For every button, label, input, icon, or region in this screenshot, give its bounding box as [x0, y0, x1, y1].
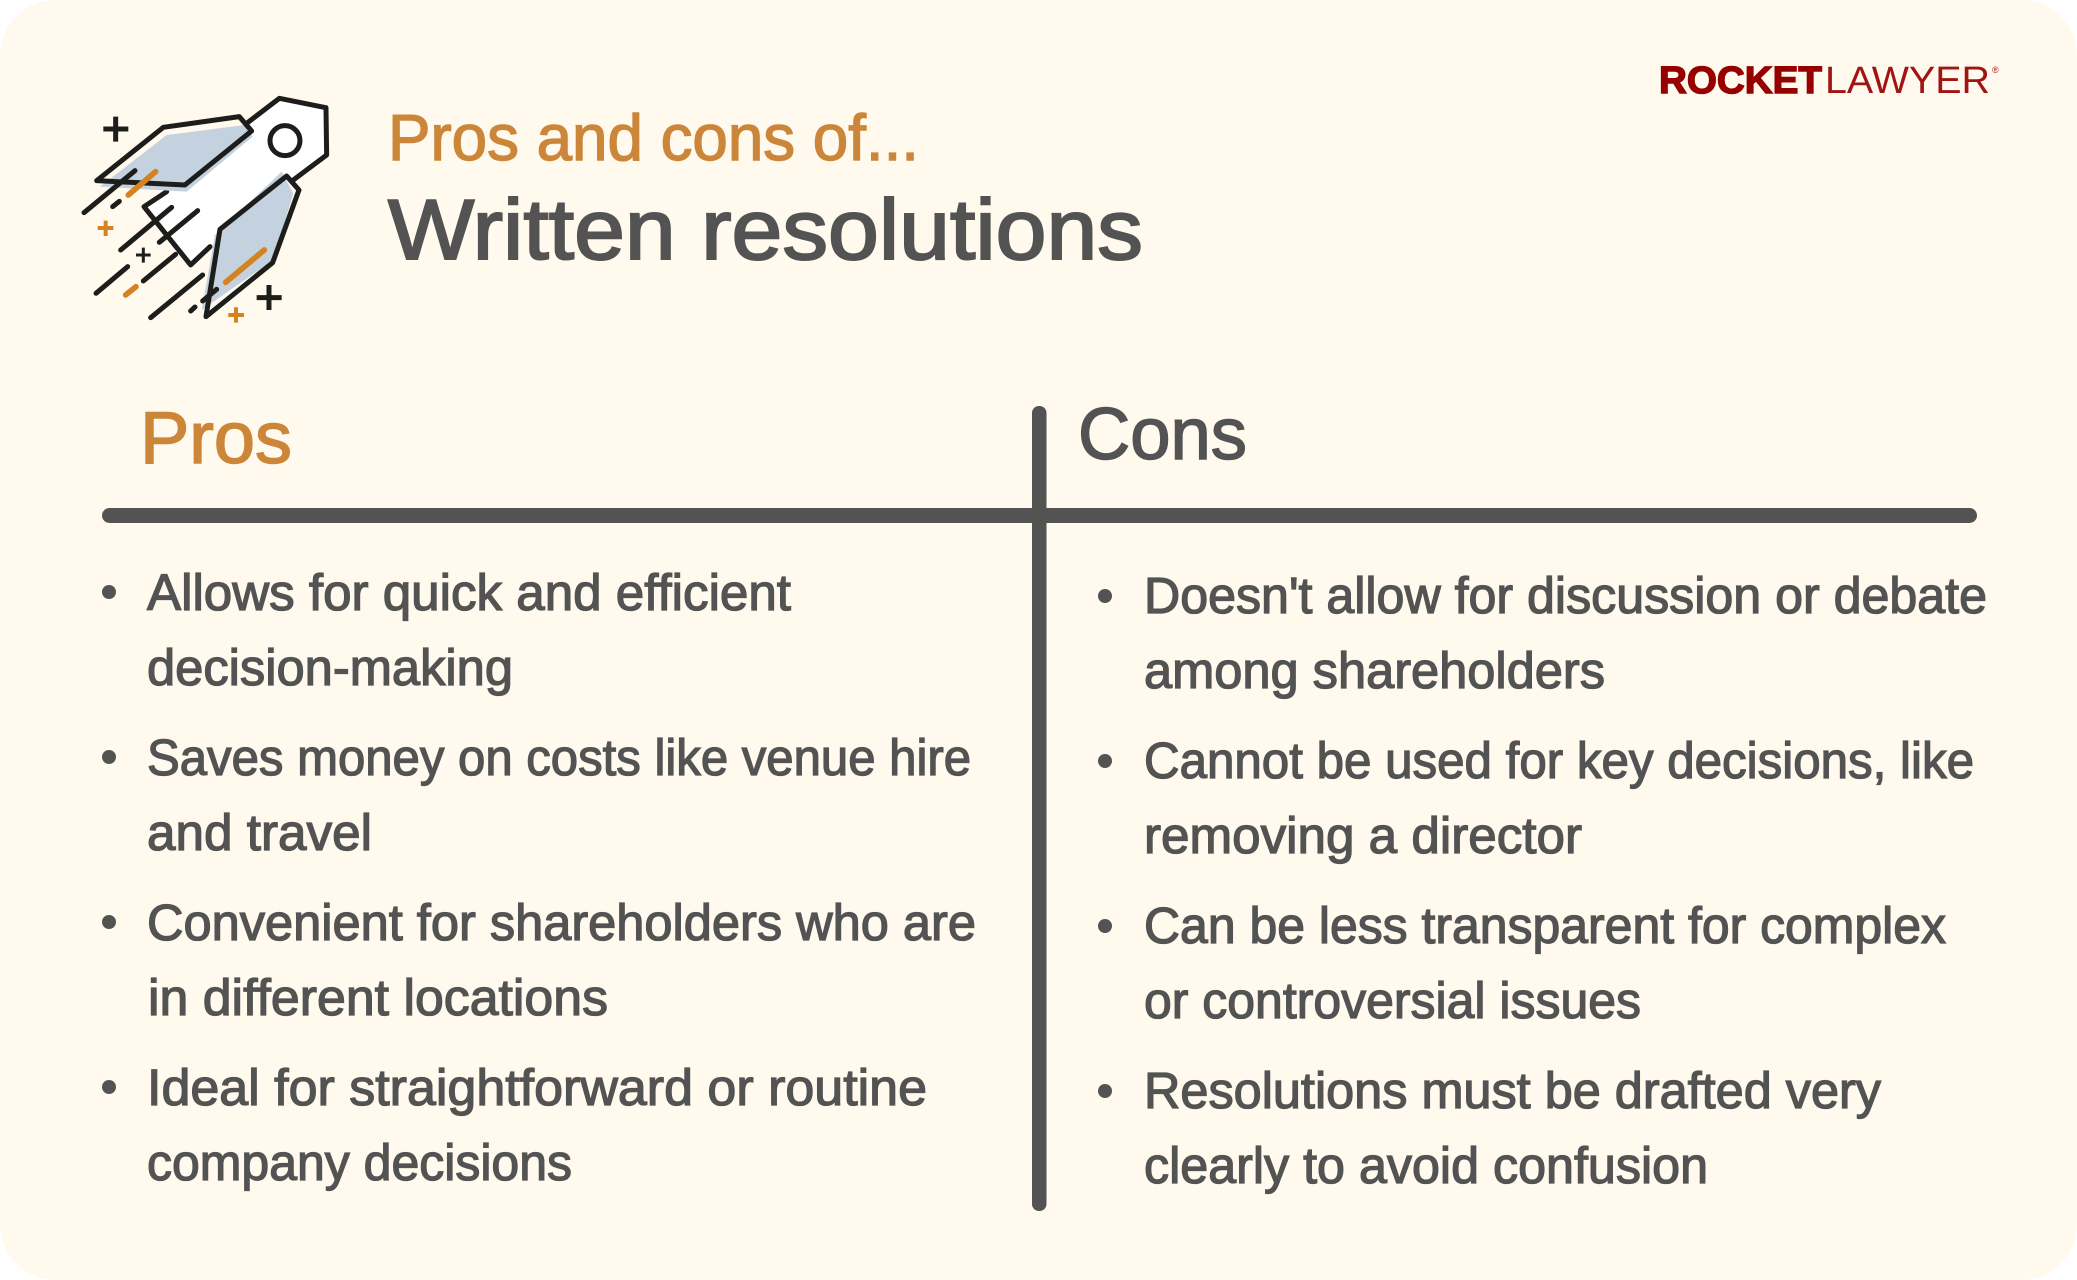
- con item 4: [1098, 1062, 1881, 1194]
- pro item 1: decision-making: [147, 639, 513, 696]
- heading: cons: Cons: [1078, 394, 1247, 475]
- con item 1: Doesn't allow for discussion or debate: [1144, 567, 1987, 624]
- table divider: vertical: [1032, 406, 1046, 1211]
- icon: rocket: [84, 98, 327, 323]
- con item 1: among shareholders: [1144, 642, 1605, 699]
- con item 3: [1098, 897, 1946, 1029]
- heading: pros: Pros: [140, 398, 292, 479]
- pro item 4: company decisions: [147, 1134, 572, 1191]
- list: cons: [1098, 567, 1987, 1194]
- list: pros: [102, 564, 976, 1191]
- con item 4: clearly to avoid confusion: [1144, 1137, 1708, 1194]
- pro item 2: [102, 729, 971, 861]
- con item 2: removing a director: [1144, 807, 1582, 864]
- logo: Rocket Lawyer: [1659, 60, 1999, 102]
- con item 1: [1098, 567, 1987, 699]
- table divider: horizontal: [102, 508, 1977, 523]
- logo: Rocket Lawyer: ®: [1992, 65, 1999, 75]
- con item 3: or controversial issues: [1144, 972, 1641, 1029]
- pro item 3: in different locations: [148, 969, 608, 1026]
- con item 2: Cannot be used for key decisions, like: [1144, 732, 1974, 789]
- pro item 1: Allows for quick and efficient: [147, 564, 791, 621]
- pro item 3: Convenient for shareholders who are: [147, 894, 976, 951]
- subtitle: Pros and cons of...: [388, 101, 919, 174]
- pro item 3: [102, 894, 976, 1026]
- logo: Rocket Lawyer: LAWYER: [1825, 60, 1990, 102]
- con item 2: [1098, 732, 1974, 864]
- pro item 4: [102, 1059, 927, 1191]
- title: Written resolutions: [388, 183, 1143, 278]
- pro item 1: [102, 564, 791, 696]
- con item 4: Resolutions must be drafted very: [1144, 1062, 1881, 1119]
- pro item 2: Saves money on costs like venue hire: [147, 729, 971, 786]
- pro item 2: and travel: [147, 804, 372, 861]
- con item 3: Can be less transparent for complex: [1144, 897, 1946, 954]
- logo: Rocket Lawyer: ROCKET: [1659, 60, 1822, 102]
- pro item 4: Ideal for straightforward or routine: [147, 1059, 927, 1116]
